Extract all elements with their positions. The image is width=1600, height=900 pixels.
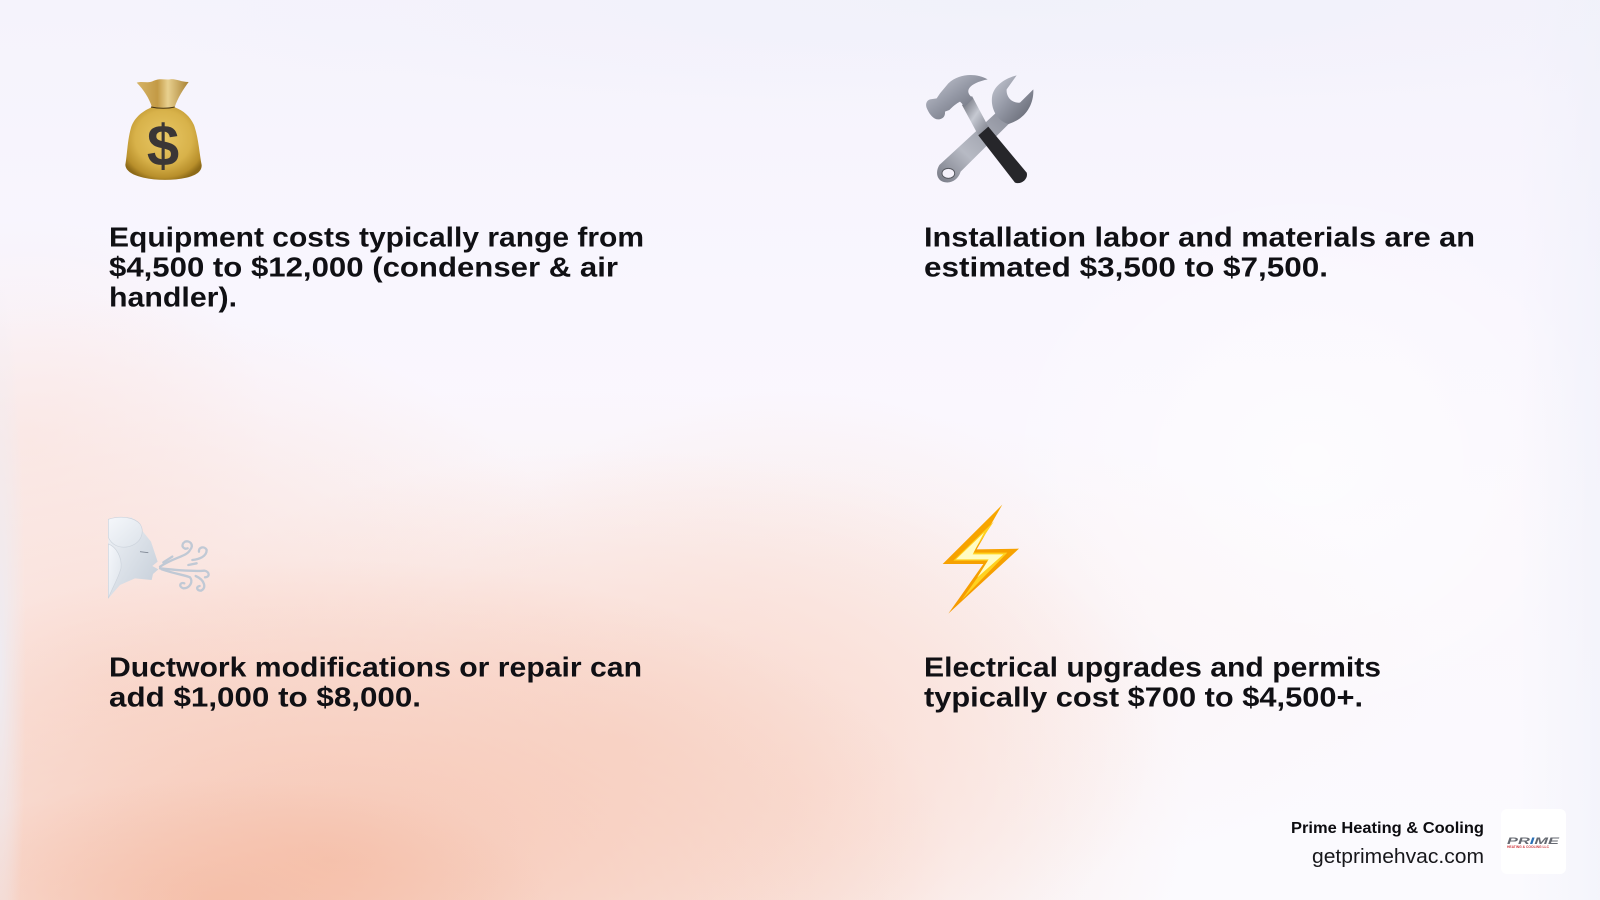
panel: equipment costs (109, 79, 644, 312)
panel: electrical (924, 505, 1381, 712)
text: ductwork (109, 652, 642, 712)
icon: money bag (125, 79, 202, 180)
icon: wind face (108, 517, 209, 598)
text: electrical: typically cost $700 to $4,500+. (924, 682, 1363, 712)
logo: PR IME (1507, 836, 1560, 847)
text: ductwork: add $1,000 to $8,000. (109, 682, 421, 712)
text: installation labor: Installation labor and materials are an (924, 222, 1475, 252)
logo (1501, 809, 1566, 874)
text: electrical (924, 652, 1381, 712)
icon: hammer and wrench (926, 75, 1033, 183)
text: equipment costs: $4,500 to $12,000 (condenser & air (109, 252, 618, 282)
panel: ductwork (108, 517, 642, 712)
text: ductwork: Ductwork modifications or repair can (109, 652, 642, 682)
text: equipment costs: Equipment costs typically range from (109, 222, 644, 252)
logo: HEATING & COOLING LLC (1507, 845, 1549, 849)
footer: brand (1291, 809, 1566, 874)
brand name: Prime Heating & Cooling (1291, 820, 1484, 837)
text: electrical: Electrical upgrades and permits (924, 652, 1381, 682)
icon: money bag: $ (147, 114, 179, 178)
text: installation labor (924, 222, 1475, 282)
text: installation labor: estimated $3,500 to $7,500. (924, 252, 1328, 282)
text: equipment costs: handler). (109, 282, 237, 312)
icon: lightning bolt (943, 505, 1019, 614)
panel: installation labor (924, 75, 1475, 283)
website: getprimehvac.com (1312, 846, 1484, 868)
text: equipment costs (109, 222, 644, 312)
